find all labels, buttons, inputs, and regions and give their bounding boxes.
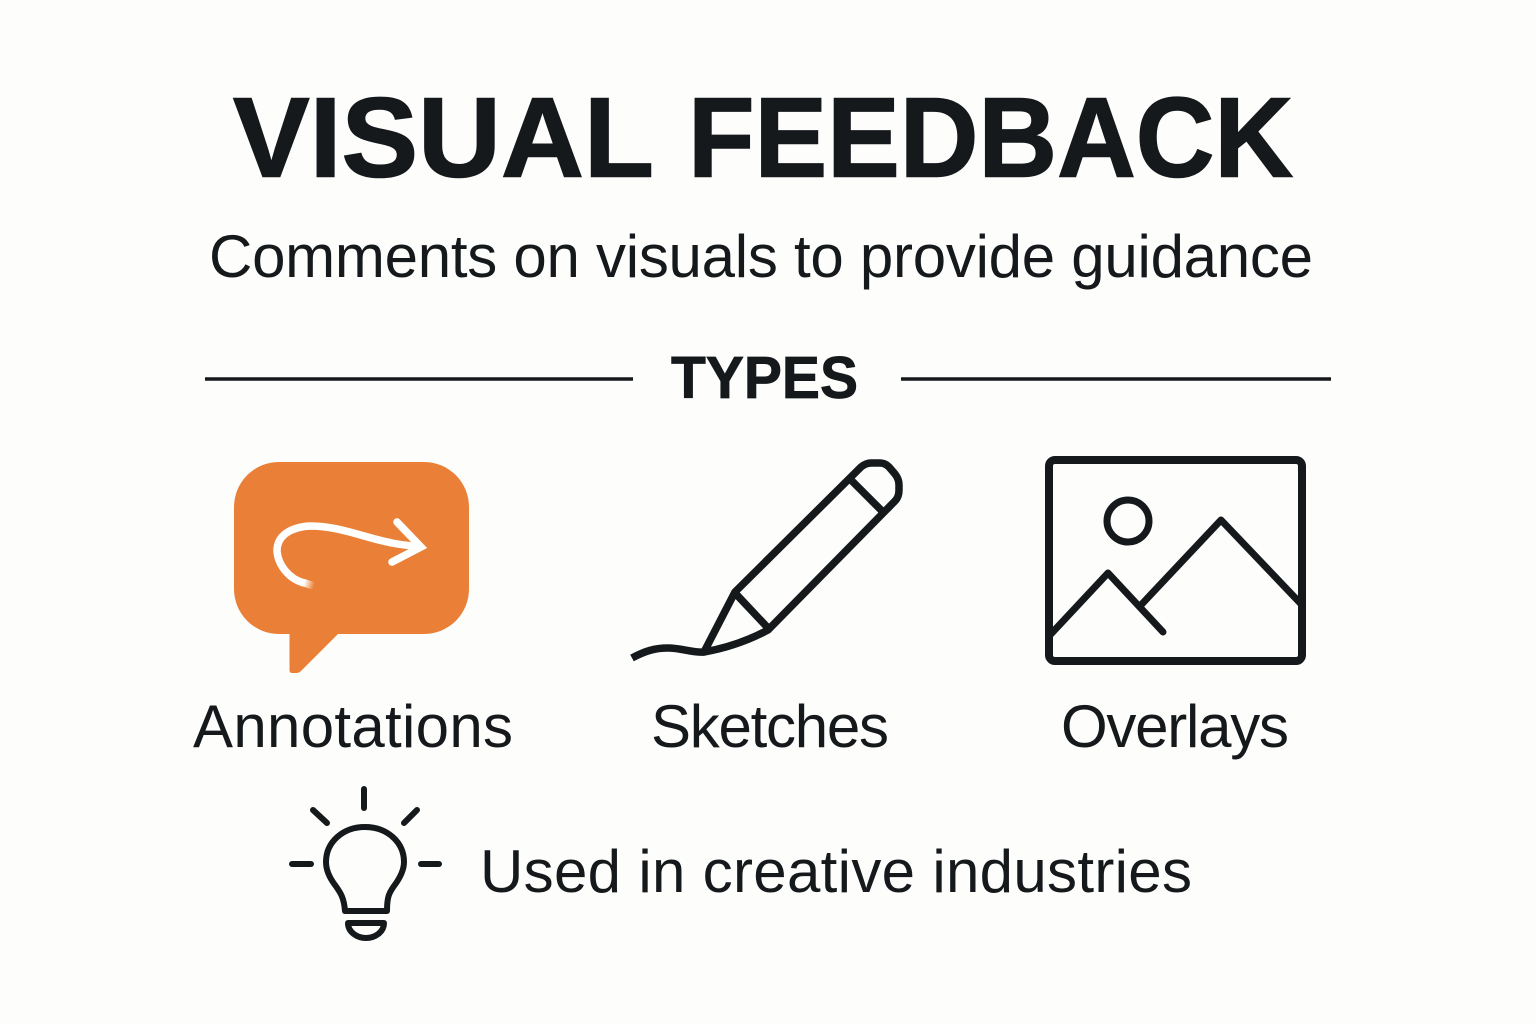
label: sketches: Sketches [651, 693, 889, 760]
icon: annotation speech bubble [234, 462, 469, 673]
title: FEEDBACK [688, 74, 1293, 200]
label: overlays: Overlays [1061, 693, 1289, 760]
subtitle: Comments on visuals to provide guidance [209, 223, 1313, 290]
label: annotations: Annotations [193, 693, 513, 760]
section heading: types: TYPES [671, 345, 858, 411]
callout: creative industries: Used in creative industries [480, 838, 1192, 905]
icon: light bulb [292, 789, 439, 938]
icon: pencil sketch [632, 463, 899, 658]
icon: image overlay [1049, 460, 1302, 661]
title [233, 74, 1293, 200]
title: VISUAL [233, 74, 654, 200]
